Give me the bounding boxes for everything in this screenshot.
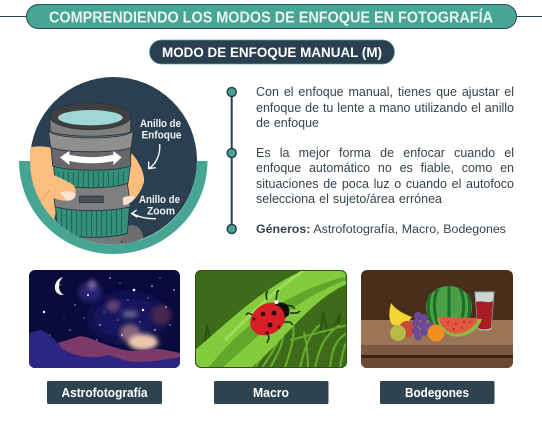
- subtitle pill: [150, 40, 394, 64]
- label: anillo de enfoque: [140, 118, 182, 142]
- right fingers: [128, 154, 144, 203]
- zoom ring: [55, 207, 130, 238]
- text block: genres: Géneros: Astrofotografía, Macro, Bodegones: [256, 222, 506, 236]
- banana: [389, 303, 412, 326]
- image: macro ladybug: [195, 270, 347, 368]
- text block: when to use: situaciones de poca luz o cuando el autofoco: [256, 176, 514, 190]
- curved arrow: focus: [149, 144, 160, 169]
- watermelon: [426, 286, 472, 328]
- left thumb: [52, 175, 76, 201]
- text block: definition: [256, 85, 514, 130]
- dark circle: [30, 77, 197, 244]
- label: Astrofotografía: Astrofotografía: [62, 385, 148, 400]
- middle barrel: [53, 183, 131, 211]
- text block: when to use: selecciona el sujeto/área errónea: [256, 192, 442, 206]
- label: anillo de enfoque: Anillo de: [140, 118, 181, 130]
- focus ring: [53, 163, 131, 188]
- illustration: lens held in hands: [19, 77, 208, 254]
- timeline: [227, 88, 236, 234]
- text block: definition: enfoque de tu lente a mano utilizando el anillo: [256, 100, 514, 114]
- back of hand, left: [30, 146, 56, 220]
- glass: [475, 292, 494, 330]
- label: Bodegones: [380, 381, 494, 404]
- text block: definition: de enfoque: [256, 116, 319, 130]
- text block: when to use: [256, 146, 514, 206]
- melon slice: [437, 317, 482, 337]
- moon: [55, 277, 64, 295]
- green apple: [390, 325, 406, 341]
- apple red: [399, 321, 415, 337]
- label: Bodegones: Bodegones: [405, 385, 469, 400]
- label: anillo de enfoque: Enfoque: [142, 130, 182, 142]
- grapes: [412, 312, 434, 340]
- text block: definition: Con el enfoque manual, tienes que ajustar el: [256, 85, 514, 99]
- lower body / mount: [122, 225, 144, 244]
- title banner: [0, 4, 542, 28]
- image: astrophotography: [29, 270, 180, 368]
- text block: when to use: Es la mejor forma de enfocar cuando el: [256, 146, 514, 160]
- teal half ring: [19, 161, 208, 254]
- image: still life: [361, 270, 513, 368]
- orange: [428, 324, 444, 342]
- right fingertip: [123, 196, 135, 205]
- subtitle pill: MODO DE ENFOQUE MANUAL (M): [162, 44, 382, 60]
- label: anillo de zoom: Anillo de: [139, 194, 180, 206]
- label: Macro: [214, 381, 328, 404]
- label: anillo de zoom: Zoom: [147, 206, 175, 218]
- double arrow: [60, 151, 122, 165]
- label: Macro: Macro: [253, 385, 289, 400]
- title banner: COMPRENDIENDO LOS MODOS DE ENFOQUE EN FOTOGRAFÍA: [49, 8, 493, 26]
- curved arrow: zoom: [132, 210, 156, 219]
- label: anillo de zoom: [139, 194, 180, 218]
- text block: when to use: enfoque automático no es fiable, como en: [256, 161, 514, 175]
- label: Astrofotografía: [47, 381, 162, 404]
- front element rings: [48, 130, 133, 152]
- ladybug: [246, 290, 300, 343]
